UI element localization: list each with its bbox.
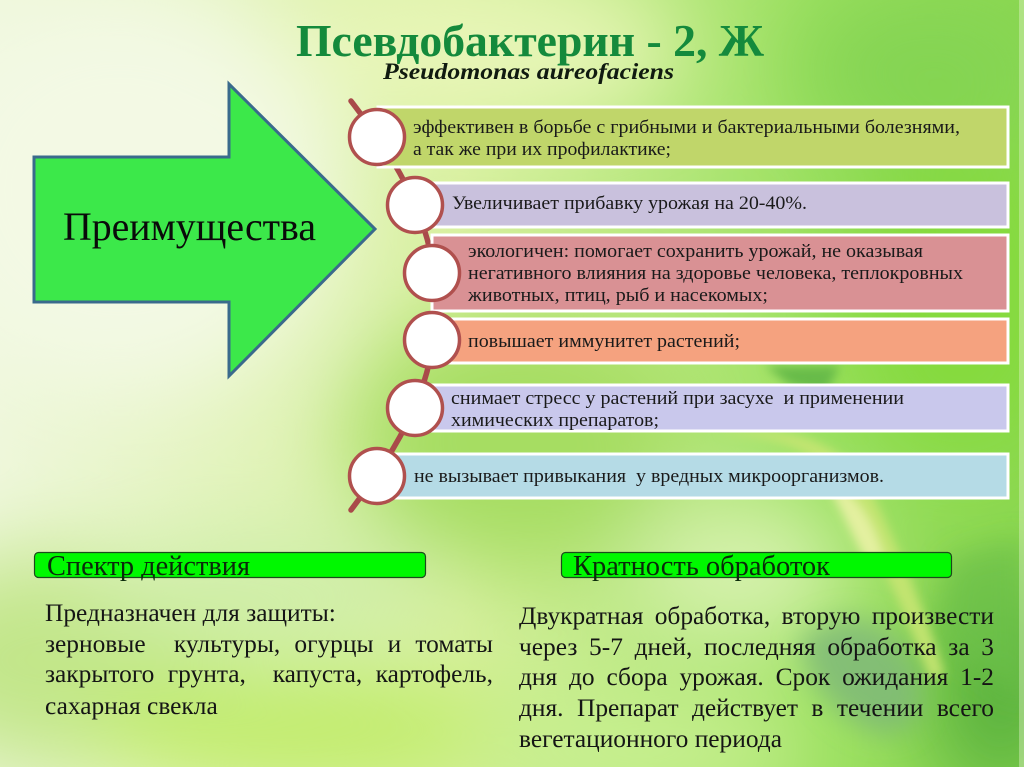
row 5: stress relief: снимает стресс у растений при засухе и применении: [451, 388, 904, 409]
subtitle: Latin species name: Pseudomonas aureofaciens: [382, 59, 674, 85]
arrow: Преимущества: Преимущества: [63, 204, 316, 249]
row 4: immunity: [404, 312, 1008, 368]
row 2: yield increase: [388, 178, 1008, 232]
text block: spectrum of action: сахарная свекла: [45, 692, 218, 720]
row 6: no resistance: [350, 448, 1008, 504]
connector stem: [351, 101, 436, 510]
text block: treatment frequency: дня до сбора урожая. Срок ожидания 1-2: [519, 663, 994, 691]
title: Псевдобактерин - 2, Ж: [296, 16, 765, 66]
heading bar: treatment frequency: [562, 551, 952, 582]
row 3: ecological: негативного влияния на здоровье человека, теплокровных: [468, 263, 963, 284]
row 2: yield increase: Увеличивает прибавку урожая на 20-40%.: [452, 193, 807, 214]
row 4: immunity: повышает иммунитет растений;: [468, 331, 740, 352]
row 1: fungal and bacterial diseases: эффективен в борьбе с грибными и бактериальными болезнями,: [413, 117, 960, 138]
text block: spectrum of action: [45, 599, 493, 720]
row 3: ecological: экологичен: помогает сохранить урожай, не оказывая: [468, 241, 923, 262]
row 1: fungal and bacterial diseases: [350, 107, 1008, 167]
text block: treatment frequency: Двукратная обработка, вторую произвести: [519, 602, 994, 630]
text block: spectrum of action: Предназначен для защиты:: [45, 599, 336, 627]
text block: treatment frequency: [519, 602, 994, 753]
row 1: fungal and bacterial diseases: а так же при их профилактике;: [413, 139, 671, 160]
heading bar: spectrum of action: Спектр действия: [47, 551, 250, 582]
arrow: Преимущества: [34, 84, 375, 376]
row 3: ecological: животных, птиц, рыб и насекомых;: [467, 285, 768, 306]
text block: treatment frequency: вегетационного периода: [519, 725, 782, 753]
text block: spectrum of action: зерновые культуры, огурцы и томаты: [45, 630, 493, 658]
row 6: no resistance: не вызывает привыкания у вредных микроорганизмов.: [414, 466, 884, 487]
row 5: stress relief: химических препаратов;: [451, 410, 659, 431]
heading bar: treatment frequency: Кратность обработок: [573, 551, 830, 582]
row 5: stress relief: [388, 380, 1008, 436]
text block: treatment frequency: через 5-7 дней, последняя обработка за 3: [519, 633, 994, 661]
row 3: ecological: [404, 235, 1008, 311]
text block: spectrum of action: закрытого грунта, капуста, картофель,: [45, 660, 493, 688]
heading bar: spectrum of action: [34, 551, 426, 582]
text block: treatment frequency: дня. Препарат действует в течении всего: [519, 694, 994, 722]
